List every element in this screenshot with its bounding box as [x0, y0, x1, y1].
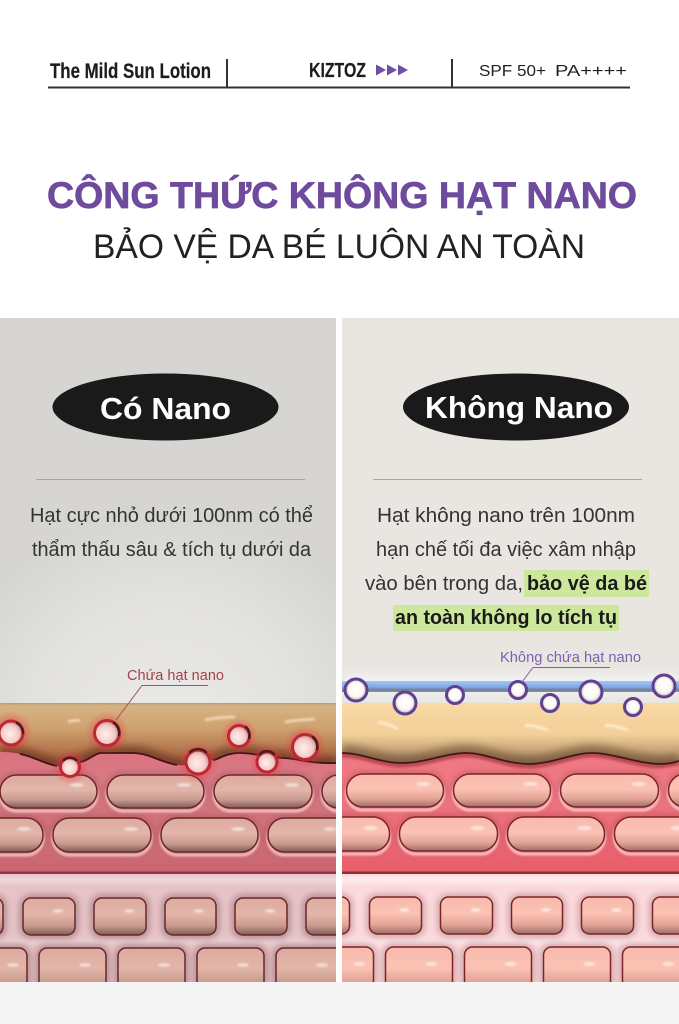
pale lower layer	[0, 873, 336, 982]
non-nano particles	[345, 675, 675, 716]
pill: có nano	[52, 374, 278, 440]
callout: không chứa hạt nano	[500, 649, 641, 682]
sunscreen film with particles	[342, 674, 679, 716]
panel: có nano	[0, 318, 336, 982]
footer band	[0, 982, 679, 1024]
pale lower layer	[342, 873, 679, 982]
SPF rating: SPF 50+	[479, 63, 546, 80]
header rules	[48, 59, 630, 88]
pill: không nano: Không Nano	[425, 390, 613, 425]
tan surface layer	[342, 703, 679, 765]
header bar	[48, 59, 630, 88]
heading line 1: CÔNG THỨC KHÔNG HẠT NANO	[47, 174, 637, 216]
panel background	[0, 318, 336, 982]
skin diagram with nano particles	[0, 703, 336, 982]
pink dermis layer	[342, 754, 679, 872]
callout: không chứa hạt nano: Không chứa hạt nano	[500, 649, 641, 666]
description with highlight: vào bên trong da,	[365, 573, 523, 595]
pill: không nano	[403, 374, 629, 440]
description	[30, 505, 313, 561]
cells	[342, 773, 679, 982]
description with highlight: bảo vệ da bé	[527, 573, 647, 595]
PA rating: PA++++	[555, 63, 627, 80]
product name: The Mild Sun Lotion	[50, 60, 211, 83]
brand name: KIZTOZ	[309, 60, 366, 82]
description: thẩm thấu sâu & tích tụ dưới da	[32, 539, 312, 561]
description: Hạt cực nhỏ dưới 100nm có thể	[30, 505, 313, 527]
tan edge shading	[342, 753, 679, 764]
title	[47, 174, 637, 266]
nano particles inside skin	[0, 711, 327, 785]
callout: chứa hạt nano: Chứa hạt nano	[127, 667, 224, 684]
pink dermis layer	[0, 752, 336, 872]
panel background	[342, 318, 679, 982]
icon: triple arrows	[376, 64, 408, 76]
blue film	[342, 681, 679, 692]
heading line 2: BẢO VỆ DA BÉ LUÔN AN TOÀN	[93, 228, 585, 266]
cells	[0, 774, 336, 982]
description with highlight: an toàn không lo tích tụ	[395, 607, 617, 629]
highlight: line 3	[524, 570, 649, 597]
description with highlight: hạn chế tối đa việc xâm nhập	[376, 539, 636, 561]
tan edge shading	[0, 701, 340, 766]
description with highlight: Hạt không nano trên 100nm	[377, 505, 635, 527]
callout: chứa hạt nano	[116, 667, 224, 720]
description with highlight	[365, 505, 649, 631]
panel: không nano	[342, 318, 679, 982]
highlight: line 4	[393, 605, 619, 631]
tan surface layer	[0, 703, 336, 767]
skin diagram	[342, 703, 679, 982]
pill: có nano: Có Nano	[100, 391, 231, 426]
